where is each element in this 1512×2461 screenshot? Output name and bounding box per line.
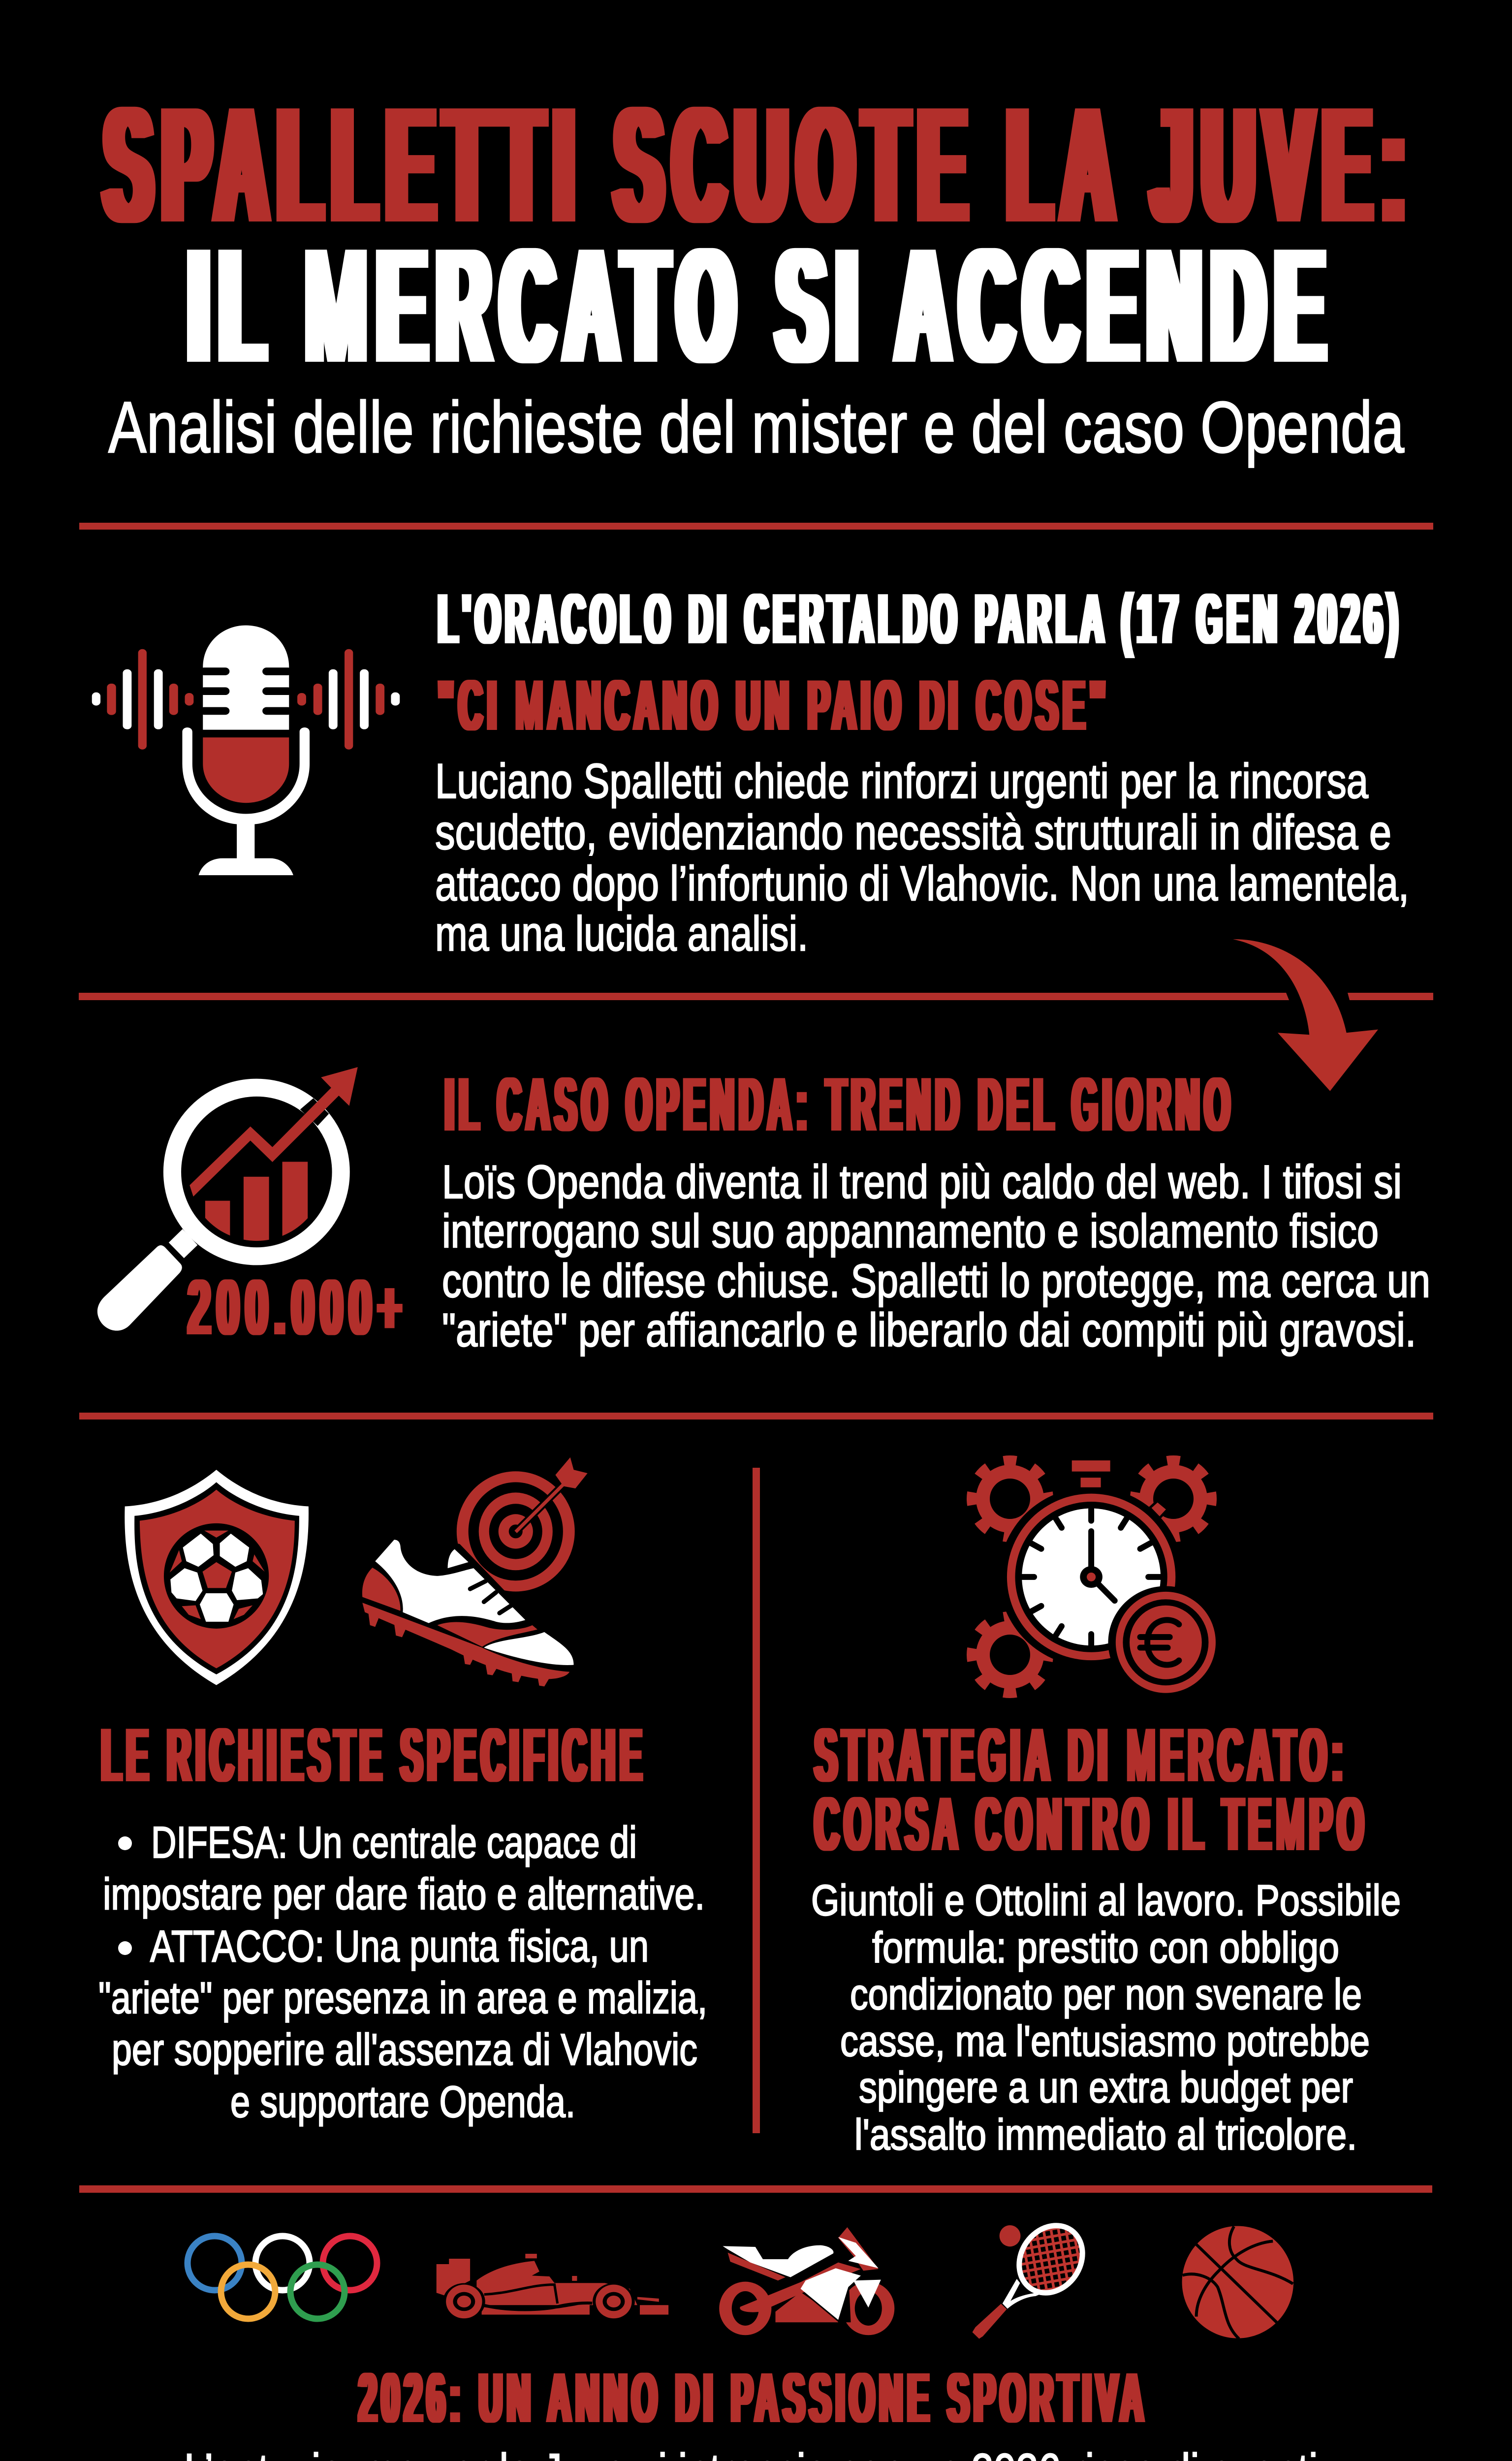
text: bullet list: "ariete" per presenza in area e malizia, <box>98 1974 707 2023</box>
divider: middle <box>79 1413 1433 1420</box>
panel: 2026 sport <box>138 2213 1378 2461</box>
text: bullet list: e supportare Openda. <box>230 2078 575 2127</box>
divider: header <box>79 523 1433 530</box>
icon: tennis racket <box>973 2213 1095 2339</box>
text: paragraph: formula: prestito con obbligo <box>872 1923 1339 1972</box>
text: bullet list: per sopperire all'assenza di Vlahovic <box>112 2025 697 2075</box>
arrow: curved down <box>1233 939 1378 1091</box>
panel: richieste specifiche <box>98 1457 707 2127</box>
icon: magnifier with growth chart <box>97 1067 358 1331</box>
stat: 200.000+: 200.000+ <box>188 1263 408 1351</box>
icon: olympic rings <box>188 2236 377 2319</box>
text: bullet list <box>98 1818 707 2127</box>
text: paragraph: l'assalto immediato al tricolore. <box>854 2110 1357 2159</box>
text: bullet list: ATTACCO: Una punta fisica, un <box>150 1922 649 1971</box>
text: paragraph: ma una lucida analisi. <box>435 906 808 961</box>
text: paragraph: casse, ma l'entusiasmo potrebbe <box>840 2017 1370 2065</box>
icon: shield with football <box>125 1470 309 1685</box>
panel: caso Openda <box>97 1062 1430 1357</box>
icon: stopwatch with gears and euro coin <box>972 1460 1223 1699</box>
divider: broken by arrow <box>79 993 1433 1000</box>
text: paragraph: Giuntoli e Ottolini al lavoro. Possibile <box>811 1876 1401 1925</box>
panel: oracolo di Certaldo <box>92 579 1409 961</box>
text: paragraph <box>811 1876 1401 2159</box>
icon: basketball <box>1182 2226 1293 2339</box>
icon: motorbike <box>719 2227 894 2335</box>
panel: strategia di mercato <box>811 1460 1401 2159</box>
icon: microphone with sound waves <box>92 626 400 875</box>
divider: lower <box>79 2185 1432 2193</box>
text: bullet list: impostare per dare fiato e alternative. <box>103 1870 705 1919</box>
text: paragraph <box>442 1156 1430 1357</box>
text: bullet list: DIFESA: Un centrale capace di <box>151 1818 637 1867</box>
text: paragraph: condizionato per non svenare le <box>850 1970 1362 2019</box>
title <box>104 73 1416 397</box>
divider: columns <box>753 1468 760 2133</box>
text: LE RICHIESTE SPECIFICHE <box>101 1712 647 1798</box>
text: paragraph: spingere a un extra budget per <box>859 2063 1353 2112</box>
text: paragraph <box>435 754 1409 961</box>
icon: boot and target <box>362 1457 588 1686</box>
icon: F1 car <box>437 2254 668 2320</box>
heading: strategia di mercato <box>815 1712 1369 1866</box>
